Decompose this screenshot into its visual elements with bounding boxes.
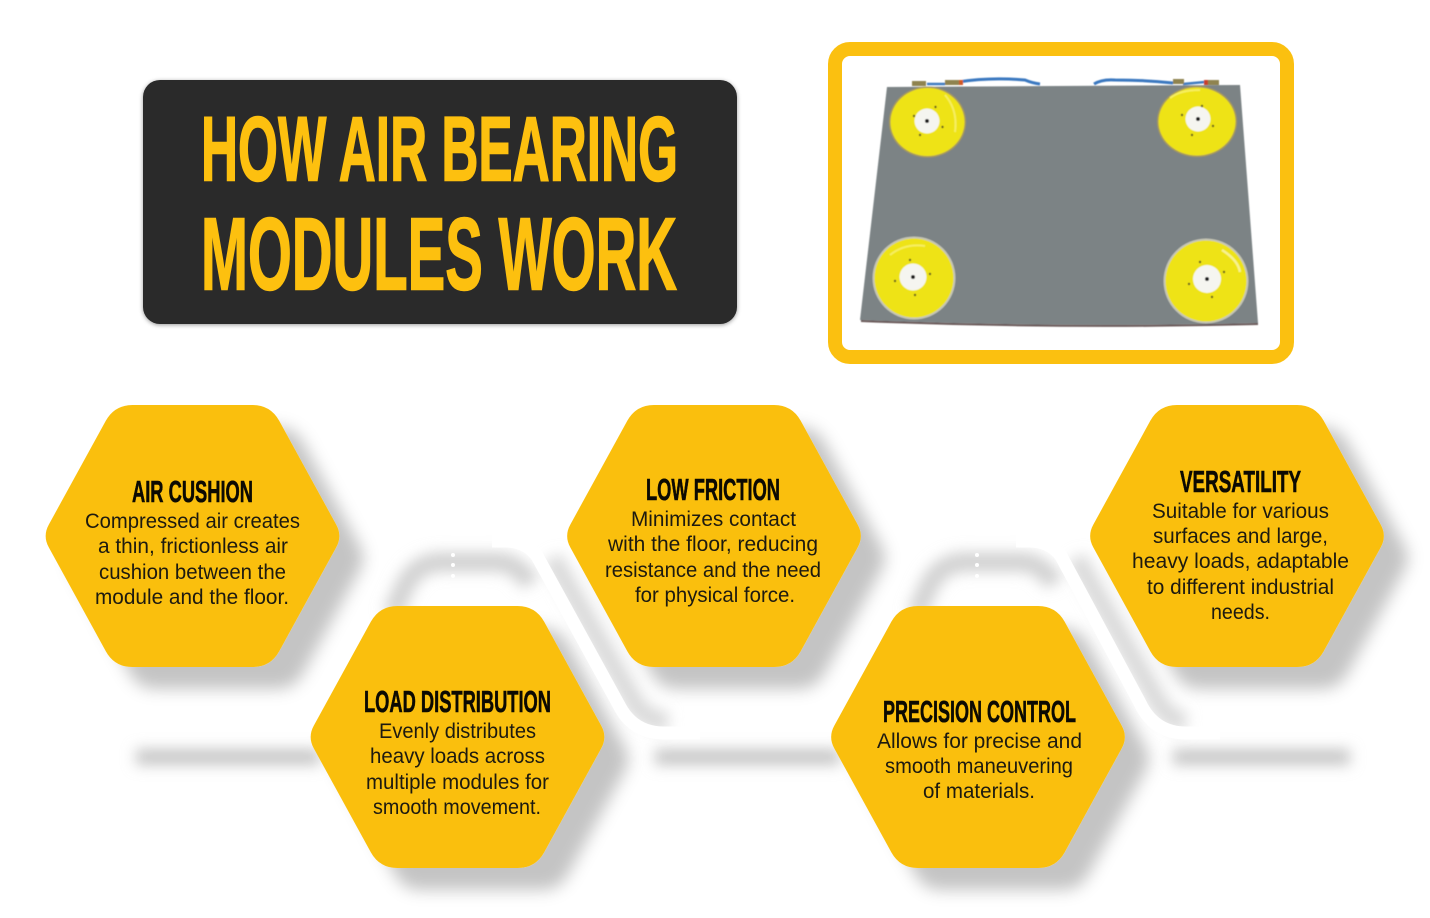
title text	[201, 98, 678, 312]
title text: HOW AIR BEARING	[201, 98, 678, 200]
text: load distribution description: multiple modules for	[366, 771, 549, 794]
text: low friction description: Minimizes contact	[631, 508, 796, 531]
title banner	[143, 80, 737, 324]
panel: air cushion hexagon	[46, 405, 339, 667]
title text: MODULES WORK	[201, 196, 677, 312]
text: low friction description: for physical force.	[635, 584, 795, 607]
text: precision control description: Allows for precise and	[877, 730, 1082, 753]
connector ribbon shadows	[136, 558, 1350, 757]
text: load distribution description: Evenly distributes	[379, 720, 536, 743]
text: air cushion description: a thin, frictionless air	[98, 535, 288, 558]
text: low friction description	[605, 508, 821, 607]
connector ribbons and dots	[451, 541, 1220, 733]
text: precision control description: smooth maneuvering	[885, 755, 1073, 778]
heading: versatility: VERSATILITY	[1180, 464, 1301, 499]
text: air cushion description	[85, 510, 300, 609]
text: versatility description	[1132, 500, 1349, 624]
text: versatility description: to different industrial	[1147, 576, 1334, 599]
plate	[860, 85, 1258, 325]
panel: low friction hexagon	[567, 405, 861, 667]
text: air cushion description: module and the floor.	[95, 586, 289, 609]
dots above precision control	[975, 553, 979, 578]
air hoses	[912, 79, 1219, 86]
heading: low friction: LOW FRICTION	[646, 472, 780, 507]
caster bottom right	[1164, 238, 1248, 324]
text: air cushion description: cushion between the	[99, 561, 286, 584]
panel: load distribution hexagon	[311, 606, 604, 868]
text: low friction description: with the floor, reducing	[607, 533, 818, 556]
text: precision control description	[877, 730, 1082, 803]
dots above load distribution	[451, 553, 455, 578]
heading: precision control: PRECISION CONTROL	[883, 694, 1076, 729]
text: versatility description: Suitable for various	[1152, 500, 1329, 523]
text: versatility description: heavy loads, adaptable	[1132, 550, 1349, 573]
text: load distribution description: heavy loads across	[370, 745, 545, 768]
text: air cushion description: Compressed air creates	[85, 510, 300, 533]
panel: precision control hexagon	[831, 606, 1125, 868]
text: versatility description: surfaces and large,	[1153, 525, 1328, 548]
text: versatility description: needs.	[1211, 601, 1270, 624]
text: low friction description: resistance and the need	[605, 559, 821, 582]
caster top left	[889, 86, 966, 158]
heading: load distribution: LOAD DISTRIBUTION	[364, 684, 551, 719]
text: load distribution description: smooth movement.	[373, 796, 541, 819]
text: precision control description: of materials.	[923, 780, 1035, 803]
caster bottom left	[872, 236, 956, 320]
heading: air cushion: AIR CUSHION	[132, 474, 253, 509]
photo panel: air bearing module	[835, 49, 1287, 357]
photo: plate with four yellow air casters	[860, 79, 1258, 327]
text: load distribution description	[366, 720, 549, 819]
panel: versatility hexagon	[1090, 405, 1384, 667]
caster top right	[1157, 86, 1237, 157]
